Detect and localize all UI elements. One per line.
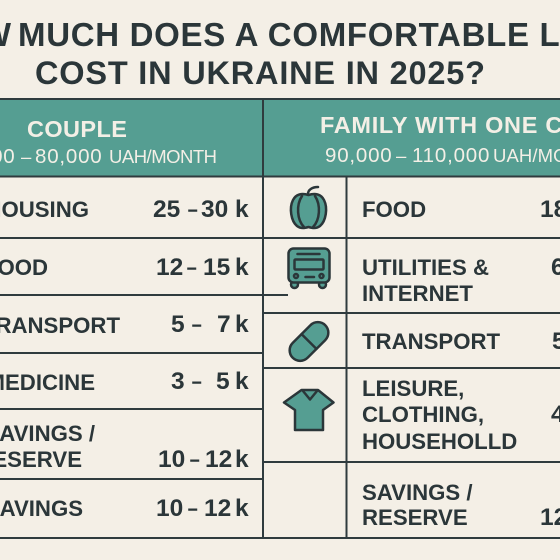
- row: medicine: 3: [171, 368, 185, 395]
- row: food: FOOD: [362, 197, 426, 222]
- heading: family with one child: –: [396, 145, 407, 166]
- heading: couple: UAH/MONTH: [109, 146, 217, 167]
- row: savings / reserve: 12: [205, 446, 232, 473]
- row: transport: [362, 328, 560, 355]
- row: food: 15: [203, 254, 230, 281]
- row: utilities and internet: UTILITIES &: [362, 255, 489, 280]
- row: housing: [0, 196, 249, 223]
- row: transport: [0, 311, 249, 338]
- heading: family with one child: 110,000: [412, 144, 490, 167]
- row: medicine: 5: [216, 368, 230, 395]
- row: housing: –: [188, 200, 197, 219]
- row: food: k: [235, 254, 249, 281]
- row: transport: 7: [217, 311, 231, 338]
- heading: couple: [0, 116, 217, 168]
- row: utilities and internet: INTERNET: [362, 281, 473, 306]
- row: savings: k: [235, 495, 249, 522]
- row: leisure, clothing, household: CLOTHING,: [362, 402, 484, 427]
- heading: couple: 80,000: [35, 145, 103, 168]
- row: medicine: –: [192, 372, 201, 391]
- row: food: [362, 196, 560, 223]
- panel: family expenses: [362, 196, 560, 531]
- row: savings: –: [188, 499, 197, 518]
- title: [0, 16, 560, 91]
- row: medicine: k: [235, 368, 249, 395]
- row: savings: 12: [204, 495, 231, 522]
- icon: shirt: [284, 390, 334, 430]
- row: savings / reserve: SAVINGS /: [362, 480, 473, 505]
- row: food: [0, 254, 249, 281]
- row: transport: 5: [171, 311, 185, 338]
- row: medicine: [0, 368, 249, 395]
- row: savings: 10: [156, 495, 183, 522]
- row: savings / reserve: [362, 480, 560, 531]
- row: savings / reserve: RESERVE: [362, 505, 468, 530]
- row: leisure, clothing, household: LEISURE,: [362, 376, 464, 401]
- row: savings / reserve: [0, 421, 249, 473]
- row: utilities and internet: [362, 254, 560, 306]
- row: leisure, clothing, household: HOUSEHOLLD: [362, 429, 517, 454]
- row: leisure, clothing, household: [362, 376, 560, 454]
- row: transport: k: [235, 311, 249, 338]
- heading: family with one child: 90,000: [325, 144, 393, 167]
- row: transport: –: [192, 315, 201, 334]
- row: housing: 25: [153, 196, 180, 223]
- panel: couple expenses: [0, 196, 249, 522]
- heading: family with one child: [320, 112, 560, 167]
- row: food: –: [187, 258, 196, 277]
- row: savings / reserve: k: [235, 446, 249, 473]
- icon: bus: [288, 248, 330, 288]
- heading: couple: COUPLE: [27, 116, 127, 142]
- row: housing: 30: [201, 196, 228, 223]
- heading: couple: –: [21, 146, 32, 167]
- panel: header band: [0, 100, 560, 176]
- row: food: 12: [156, 254, 183, 281]
- row: transport: TRANSPORT: [362, 329, 501, 354]
- icon: pumpkin: [291, 187, 326, 228]
- row: savings: [0, 495, 249, 522]
- icon: pill: [285, 318, 333, 365]
- title: COST IN UKRAINE IN 2025?: [35, 55, 486, 91]
- row: housing: k: [235, 196, 249, 223]
- row: savings / reserve: 10: [158, 446, 185, 473]
- row: savings / reserve: –: [190, 450, 199, 469]
